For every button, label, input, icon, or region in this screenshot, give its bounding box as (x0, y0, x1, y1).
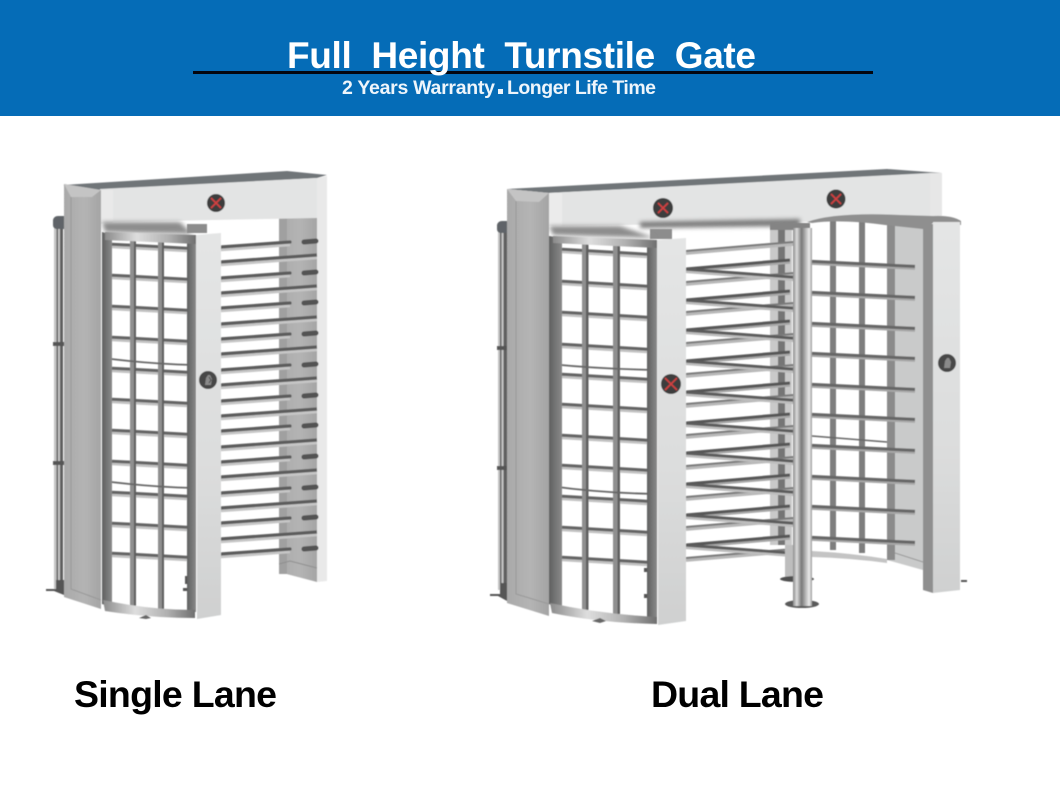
left post (64, 184, 101, 609)
center bracket (770, 223, 810, 230)
label: dual lane: Dual Lane (651, 673, 824, 715)
overhead beam (507, 169, 942, 239)
label: single lane: Single Lane (74, 673, 277, 715)
gate grid (103, 241, 195, 610)
overhead beam (63, 171, 327, 234)
center wing post (657, 238, 686, 625)
header banner (0, 0, 1060, 116)
right lane bars (812, 261, 915, 545)
gate wing post (196, 233, 221, 619)
illustration: dual lane turnstile (490, 169, 967, 625)
left lane grid (550, 244, 657, 614)
center column (780, 228, 819, 608)
gate jambs and top rail (102, 232, 196, 619)
post bar sockets (304, 241, 316, 549)
right wing post (933, 222, 967, 593)
left post (507, 189, 549, 616)
center lane bars (686, 242, 793, 560)
right post (279, 176, 327, 582)
rear panel (887, 222, 933, 593)
curved top rail right (807, 214, 961, 229)
icon: red cross indicator left (653, 198, 673, 218)
subtitle: Longer Life Time (507, 77, 656, 99)
subtitle (342, 77, 656, 99)
center rear support (770, 225, 792, 545)
title: Full Height Turnstile Gate (287, 35, 756, 76)
icon: card reader (199, 371, 217, 389)
illustration: single lane turnstile (46, 171, 327, 619)
icon: red cross indicator (207, 194, 225, 212)
title underline (193, 71, 873, 74)
rear grid right lane (812, 220, 887, 563)
icon: card reader (938, 354, 956, 372)
icon: red cross indicator right (826, 190, 846, 208)
back tube (490, 221, 508, 601)
left lane jambs and rail (549, 236, 657, 624)
subtitle: 2 Years Warranty (342, 77, 495, 99)
back tube (46, 216, 64, 595)
turnstile bars far side (221, 242, 317, 557)
icon: red cross indicator center (661, 374, 681, 394)
